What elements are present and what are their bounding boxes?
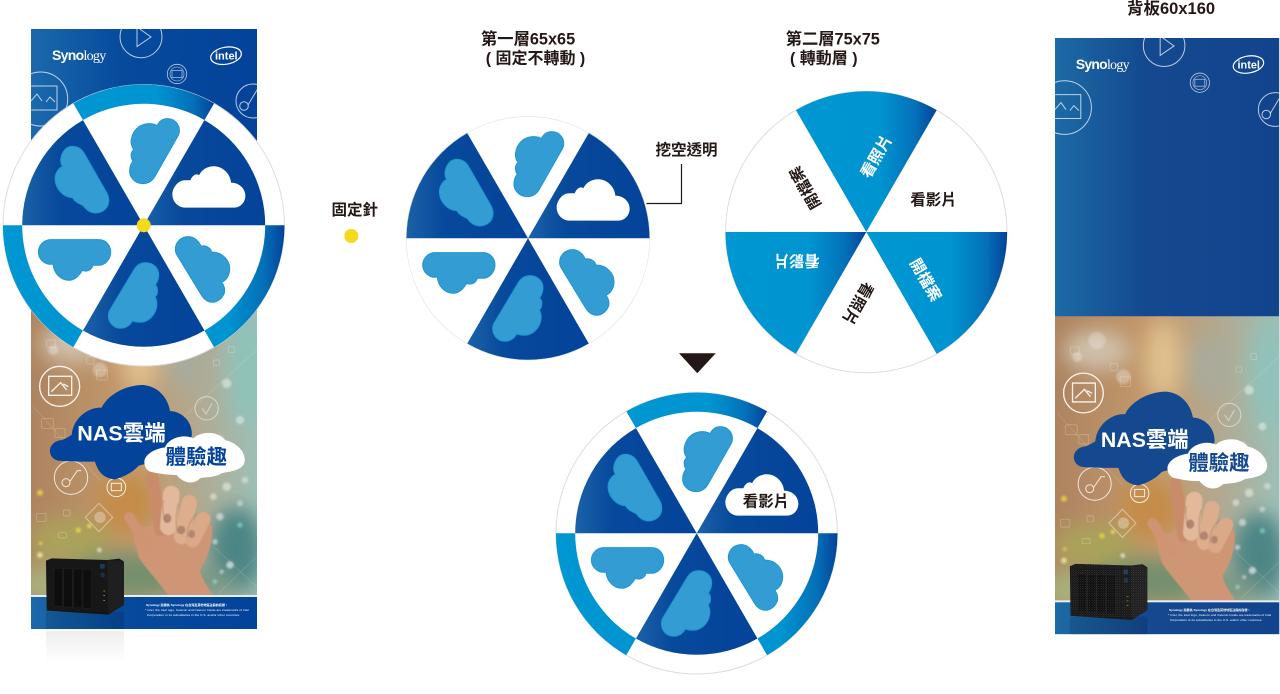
Intel logo: intel [215,50,238,62]
legal note: Synology 商標為 Synology 在台灣及其他地區註冊的商標。 [1169,607,1250,612]
panel: back board [1038,25,1280,634]
callout line [646,164,682,204]
NAS device speckled [1070,564,1147,634]
legal note: Synology 商標為 Synology 在台灣及其他地區註冊的商標。 [146,602,228,607]
title: back board: 背板60x160 [1127,0,1215,18]
legal note: Corporation or its subsidiaries in the U.S. and/or other countries. [1170,618,1262,622]
cloud label 看影片: 看影片 [743,492,789,510]
band divider [31,595,257,597]
blue cloud [1074,392,1215,485]
legal note [145,602,249,617]
board background blue [31,29,257,629]
yellow pin [344,229,358,243]
bottom blue band [31,597,257,629]
arrow down [679,353,716,373]
label: 挖空透明: 挖空透明 [656,140,718,159]
wheel label 看照片: 看照片 [857,132,896,181]
title: layer one: ( 固定不轉動 ) [486,48,585,68]
Synology logo: Synology [52,47,106,64]
assembled wheel on board [3,85,284,366]
band divider [1055,600,1279,602]
wheel: combined result [556,393,838,674]
wheel label 看影片: 看影片 [910,191,957,209]
title: layer one [481,30,585,68]
bottom blue band [1055,602,1279,634]
photo with hand and bokeh [17,309,265,605]
heading NAS雲端: NAS雲端 [77,422,166,446]
blue cloud [50,385,192,479]
title: layer one: 第一層65x65 [481,30,575,48]
back board icons [1055,38,1280,135]
heading NAS雲端: NAS雲端 [1101,428,1189,452]
wheel label 開檔案 rotated: 開檔案 [906,255,946,305]
heading 體驗趣: 體驗趣 [166,445,227,469]
legal note: Corporation or its subsidiaries in the U.S. and/or other countries. [147,613,240,617]
NAS device [46,558,124,629]
wheel: second layer [726,91,1007,373]
heading 體驗趣: 體驗趣 [1188,451,1249,475]
white cloud [1167,439,1267,488]
board decorative icons [31,29,257,126]
legal note: * Intel, the Intel logo, Celeron and Celeron Inside are trademarks of Intel [145,608,249,612]
wheel label 看影片 inverted: 看影片 [773,252,820,270]
back board background [1055,38,1279,634]
panel: assembled display board [31,29,257,630]
Intel logo [1232,54,1265,76]
Synology logo: Synology [1076,56,1130,73]
wheel: first layer [406,117,650,360]
wheel label 開檔案: 開檔案 [785,163,825,213]
Intel logo: intel [1238,59,1260,71]
legal note [1168,607,1272,622]
title: layer two: 第二層75x75 [786,30,880,48]
white cloud [144,433,245,482]
photo with hand and bokeh [1041,316,1280,610]
label: 固定針: 固定針 [332,200,379,219]
fixing pin [137,218,151,232]
title: layer two [786,30,880,68]
title: layer two: ( 轉動層 ) [790,48,858,68]
Intel logo [209,45,243,67]
legal note: * Intel, the Intel logo, Celeron and Celeron Inside are trademarks of Intel [1168,613,1272,617]
wheel label 看照片 rotated: 看照片 [838,279,877,328]
NAS reflection below board [46,631,124,663]
